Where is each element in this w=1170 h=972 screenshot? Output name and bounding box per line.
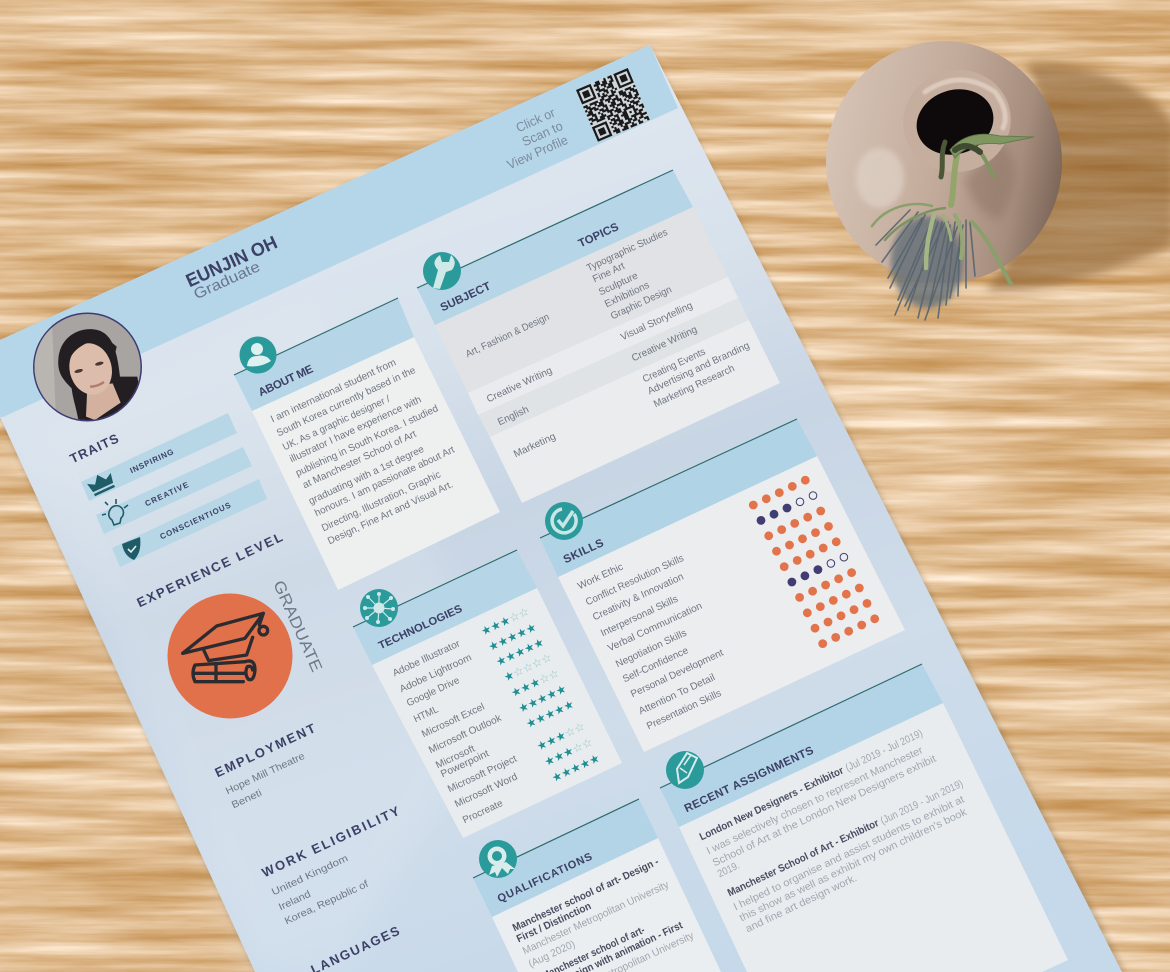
skills list: Negotiation Skills [614, 628, 689, 670]
trait bar: inspiring: INSPIRING [129, 447, 175, 475]
biography text: Directing, Illustration, Graphic [320, 469, 443, 534]
star ratings: ★★★☆☆ [534, 719, 587, 753]
employment heading: EMPLOYMENT [212, 721, 318, 780]
vase shadow [985, 63, 1170, 291]
icon: pencil [666, 751, 704, 789]
technology list: HTML [412, 704, 441, 725]
qualification entries: (Aug 2020) [527, 938, 577, 970]
biography text: Design, Fine Art and Visual Art. [326, 479, 455, 547]
countries [270, 853, 370, 927]
technology list [391, 638, 519, 826]
panel: skills [540, 419, 905, 752]
icon: graduation cap and books [183, 613, 268, 682]
technology list: Microsoft Outlook [427, 712, 504, 756]
skills list: Work Ethic [576, 562, 625, 592]
assignment entries: this show as well as exhibit my own children's book [738, 806, 969, 924]
topics list: Typographic Studies [585, 227, 670, 274]
topics list: Creative Writing [630, 324, 699, 364]
biography text: at Manchester School of Art [301, 429, 418, 491]
thistle head blur mass [891, 216, 963, 308]
experience heading: EXPERIENCE LEVEL [134, 529, 285, 610]
panel: qualifications [473, 799, 721, 972]
technology list: Adobe Lightroom [398, 652, 473, 695]
star ratings: ★★★☆☆ [542, 735, 595, 769]
assignment entries: I was selectively chosen to represent Manchester [705, 744, 925, 857]
star ratings: ★★★★★ [494, 635, 546, 669]
assignment entries: (Jun 2019 - Jun 2019) [879, 778, 965, 827]
technology list: Powerpoint [439, 748, 491, 780]
topics list: Advertising and Branding [646, 340, 751, 397]
subject list: Creative Writing [485, 365, 554, 405]
star ratings: ★☆☆☆☆ [501, 650, 554, 684]
skill rating dots [749, 476, 879, 648]
header band [0, 45, 678, 425]
icon: award rosette [479, 840, 517, 878]
employers: Hope Mill Theatre [224, 751, 307, 797]
vase mouth [908, 80, 1002, 164]
biography text: graduating with a 1st degree [307, 444, 426, 507]
skills list: Conflict Resolution Skills [584, 553, 686, 608]
heading: SKILLS [562, 537, 606, 566]
vertical label: GRADUATE [269, 578, 325, 675]
technology list: Microsoft Excel [420, 702, 486, 740]
employers: Beneti [230, 788, 264, 811]
biography text: South Korea currently based in the [275, 365, 418, 439]
vase with thistle [826, 41, 1170, 320]
assignment entries: 2019. [716, 860, 742, 880]
heading: ABOUT ME [257, 363, 316, 399]
left column: experience level [134, 529, 325, 718]
subject list: Marketing [512, 431, 558, 460]
assignment entries: and fine art design work. [744, 872, 859, 935]
countries: Ireland [277, 889, 313, 913]
left column: traits [67, 413, 267, 567]
assignment entries: London New Designers - Exhibitor [698, 765, 846, 843]
star ratings: ★★★★★ [524, 697, 576, 731]
left column: work eligibility [259, 803, 402, 927]
qualification entries: First / Distinction [515, 900, 593, 945]
assignment entries: School of Art at the London New Designers exhibit [711, 753, 938, 869]
trait bar: conscientious [112, 479, 267, 567]
technology list: Microsoft [434, 743, 477, 771]
trait bar: creative [96, 447, 252, 534]
trait bar: conscientious: CONSCIENTIOUS [159, 500, 233, 541]
scan prompt [505, 105, 570, 172]
assignment entries: I helped to organise and assist students to exhibit at [732, 793, 966, 913]
qualification entries: Manchester Metropolitan University [521, 878, 671, 957]
vase neck [892, 58, 1022, 184]
assignment entries: Manchester School of Art - Exhibitor [726, 817, 881, 899]
star ratings: ★★★★★ [549, 751, 602, 785]
panel: about me [234, 298, 500, 590]
orange badge [168, 594, 292, 718]
left column: employment [212, 721, 318, 811]
icon: wrench [423, 252, 461, 290]
heading: TECHNOLOGIES [377, 603, 464, 652]
topics list: Marketing Research [652, 363, 737, 410]
skills list: Creativity & Innovation [591, 571, 685, 623]
technology list: Procreate [461, 798, 505, 826]
topics list [585, 227, 751, 410]
trait bar: inspiring [81, 413, 237, 501]
icon: person [240, 336, 276, 374]
star ratings: ★★★☆☆ [479, 604, 531, 638]
thistle spikes and leaves [872, 134, 1034, 320]
star ratings: ★★★★★ [516, 681, 569, 716]
assignment entries: (Jul 2019 - Jul 2019) [844, 727, 925, 774]
traits heading: TRAITS [67, 431, 121, 466]
soft light on left column [20, 300, 500, 972]
technology list: Microsoft Word [453, 772, 519, 810]
topics heading: TOPICS [577, 221, 621, 250]
panel: technologies [353, 550, 622, 838]
skills list: Attention To Detail [637, 672, 717, 717]
scan prompt: Scan to [520, 118, 565, 149]
subject list [464, 312, 558, 460]
panel: recent assignments [660, 664, 1068, 972]
topics list: Visual Storytelling [619, 300, 694, 343]
technology list: Microsoft Project [446, 753, 519, 795]
topics list: Exhibitions [603, 280, 651, 310]
biography text: illustrator I have experience with [288, 394, 423, 465]
table row stripes [435, 207, 749, 437]
biography text: publishing in South Korea. I studied [294, 403, 440, 479]
panel: subject and topics [417, 170, 780, 503]
subject heading: SUBJECT [439, 281, 493, 314]
biography text: UK. As a graphic designer / [281, 394, 392, 453]
topics list: Fine Art [591, 261, 627, 285]
technology list: Adobe Illustrator [391, 638, 463, 679]
star ratings: ★★★☆☆ [509, 666, 561, 700]
heading: QUALIFICATIONS [496, 851, 594, 905]
skills list: Presentation Skills [645, 688, 723, 732]
icon: check badge [545, 502, 583, 540]
profile photo [33, 312, 142, 422]
star ratings: ★★★★★ [486, 620, 539, 654]
qualification entries: Manchester school of art- Design - [511, 856, 661, 934]
topics list: Creating Events [641, 347, 707, 385]
scan prompt: Click or [514, 105, 558, 135]
icon: network chip [360, 589, 398, 627]
QR code [576, 68, 650, 142]
biography text: honours. I am passionate about Art [313, 445, 457, 519]
biography text: I am international student from [269, 357, 398, 425]
scan prompt: View Profile [505, 132, 570, 172]
skills list: Self-Confidence [621, 645, 691, 685]
countries: Korea, Republic of [283, 879, 370, 927]
heading: RECENT ASSIGNMENTS [683, 745, 816, 815]
skills list: Personal Development [629, 647, 726, 700]
skills list: Interpersonal Skills [599, 594, 680, 639]
subject list: Art, Fashion & Design [464, 312, 551, 360]
star ratings [479, 604, 602, 785]
biography text [269, 357, 457, 547]
topics list: Graphic Design [609, 284, 674, 322]
role: Graduate [191, 258, 263, 303]
employers [224, 751, 307, 811]
subject list: English [496, 404, 531, 428]
technology list: Google Drive [405, 675, 462, 709]
topics list: Sculpture [597, 270, 640, 298]
countries: United Kingdom [270, 853, 350, 898]
eligibility heading: WORK ELIGIBILITY [259, 803, 402, 880]
trait bar: creative: CREATIVE [144, 480, 191, 508]
skills list [576, 553, 726, 732]
name: EUNJIN OH [182, 231, 280, 291]
qualification entries [511, 856, 696, 972]
assignment entries [698, 727, 969, 935]
vase body [826, 41, 1062, 283]
skills list: Verbal Communication [606, 601, 704, 654]
